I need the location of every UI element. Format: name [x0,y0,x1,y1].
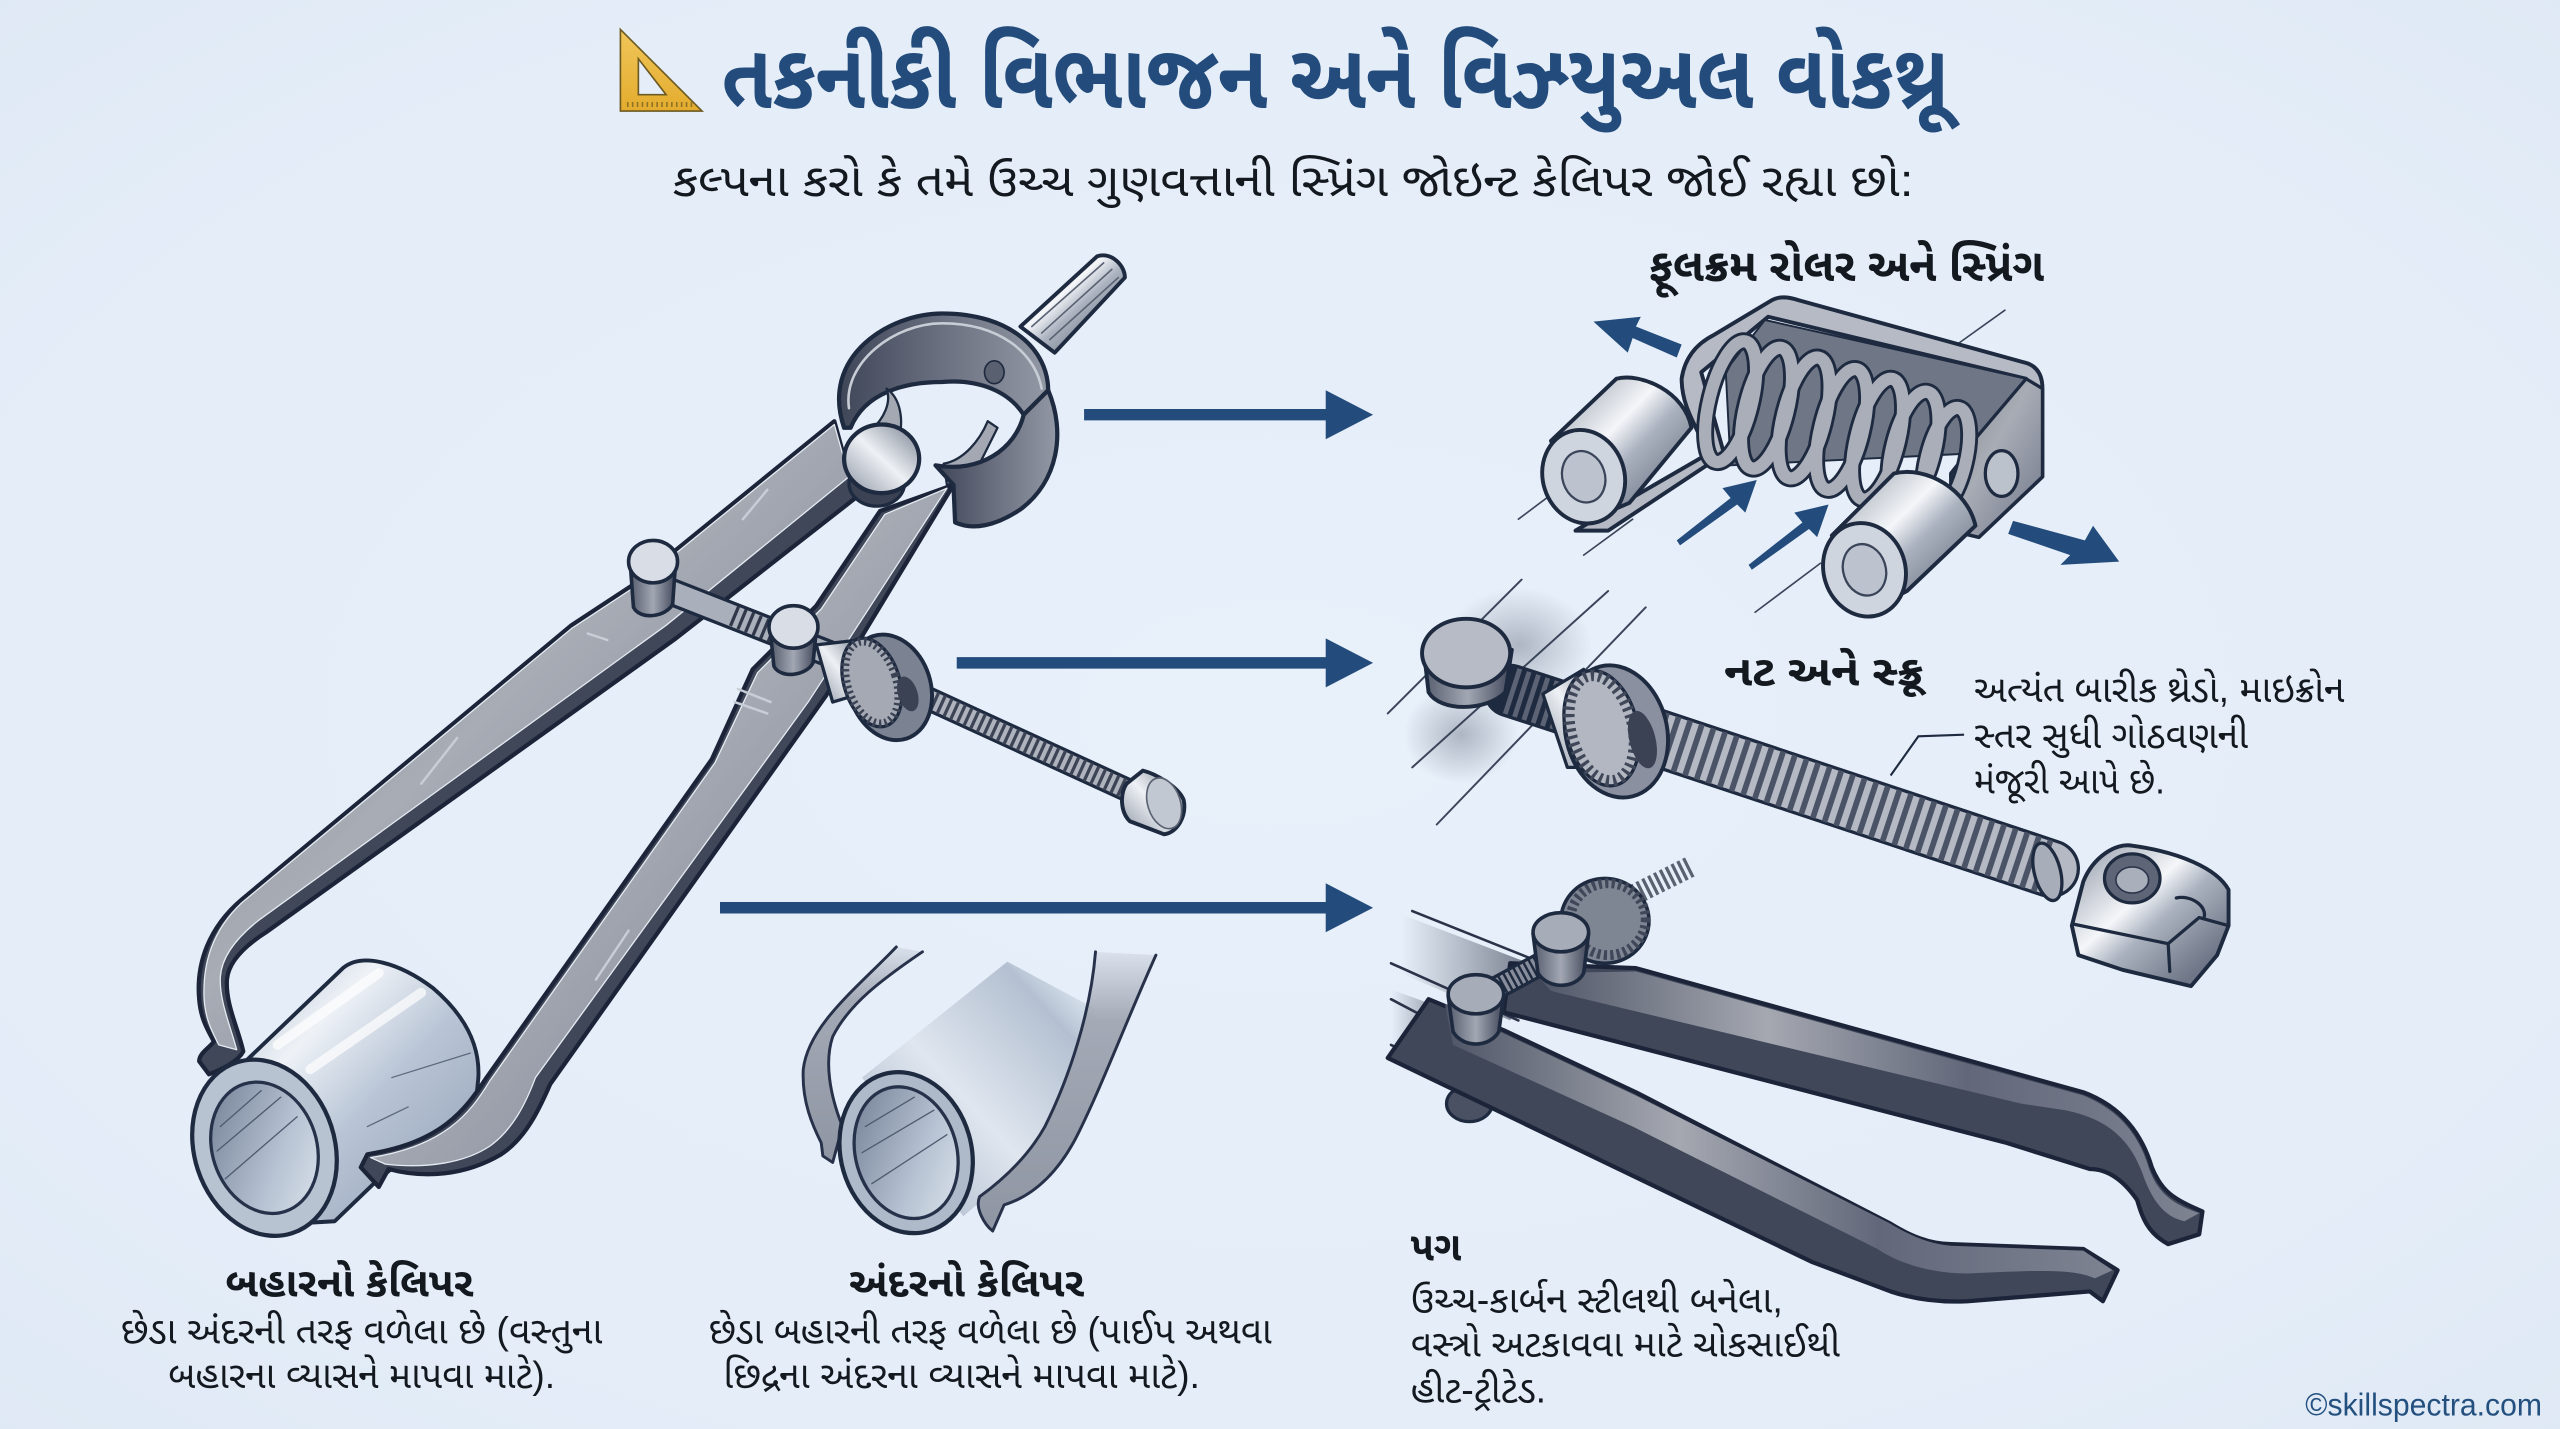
outside caliper label: બહારના વ્યાસને માપવા માટે). [168,1354,555,1396]
outside caliper label [121,1258,602,1396]
spring ring front band [936,390,1057,526]
main caliper illustration [170,255,1188,1255]
left leg [803,947,922,1162]
heading: fulcrum roller and spring: ફૂલક્રમ રોલર અને સ્પ્રિંગ [1649,239,2044,298]
knurled wheel [816,624,945,751]
bracket [1576,297,2042,537]
title: તકનીકી વિભાજન અને વિઝ્યુઅલ વોકથ્રૂ [722,25,1961,132]
arrow: spring force 2 [1749,504,1829,570]
legs label [1411,1223,1840,1411]
legs label: હીટ-ટ્રીટેડ. [1411,1368,1546,1411]
arrow: to nut and screw [957,638,1373,687]
left roller [1530,378,1691,534]
tube workpiece [170,961,478,1255]
right leg [361,485,953,1187]
knurled knob [1020,255,1125,353]
barrel nut [2072,845,2229,986]
tube [862,962,1096,1216]
callout: fine threads: અત્યંત બારીક થ્રેડો, માઇક્રોન [1974,668,2345,710]
callout: fine threads [1974,668,2345,803]
inside caliper illustration [803,947,1156,1249]
upper leg [1504,963,2202,1244]
adjusting screw [669,591,1188,834]
callout: fine threads: સ્તર સુધી ગોઠવણની [1974,714,2248,758]
inside caliper label: છેડા બહારની તરફ વળેલા છે (પાઈપ અથવા [709,1310,1272,1352]
callout: fine threads: મંજૂરી આપે છે. [1974,759,2165,803]
spring assembly illustration [1518,297,2042,627]
inside caliper label [709,1258,1272,1396]
arrow: to legs [720,883,1373,932]
subtitle: કલ્પના કરો કે તમે ઉચ્ચ ગુણવત્તાની સ્પ્રિંગ જોઇન્ટ કેલિપર જોઈ રહ્યા છો: [673,154,1913,208]
arrow: spring force 1 [1677,480,1757,545]
inside caliper label: અંદરનો કેલિપર [849,1258,1085,1305]
arm smudge and lines [1388,580,1646,824]
inside caliper label: છિદ્રના અંદરના વ્યાસને માપવા માટે). [723,1354,1200,1396]
threaded rod [1510,691,2067,904]
heading: nut and screw: નટ અને સ્ક્રૂ [1724,647,1927,698]
left leg [199,421,856,1074]
screw head [1422,619,1512,707]
copyright: ©skillspectra.com [2305,1388,2542,1423]
rod and wheel [1494,867,1690,989]
guide lines [1518,310,2005,612]
legs label: વસ્ત્રો અટકાવવા માટે ચોકસાઈથી [1411,1323,1840,1365]
spring coils [1695,336,1978,517]
nut and screw illustration [1388,580,2229,986]
legs label: પગ [1411,1223,1461,1269]
arrow: upper left force [1593,317,1682,358]
icon: set square [620,29,702,111]
outside caliper label: બહારનો કેલિપર [225,1258,474,1305]
lower leg [1388,999,2118,1302]
legs illustration [1388,867,2202,1302]
spring ring back [839,313,1048,485]
faded arm bands [1391,911,1543,1078]
pins [1448,913,1589,1044]
arrow: to fulcrum roller [1084,390,1373,439]
rear foot [1447,1086,1492,1122]
knurled wheel [1543,654,1682,809]
pivot disc [844,424,919,506]
right roller [1811,472,1976,627]
right leg [978,952,1156,1231]
tube face [821,1056,991,1249]
leader line [1891,735,1964,776]
arrow: lower right force [2008,521,2119,565]
pins [629,540,818,674]
legs label: ઉચ્ચ-કાર્બન સ્ટીલથી બનેલા, [1411,1279,1783,1321]
outside caliper label: છેડા અંદરની તરફ વળેલા છે (વસ્તુના [121,1310,602,1354]
